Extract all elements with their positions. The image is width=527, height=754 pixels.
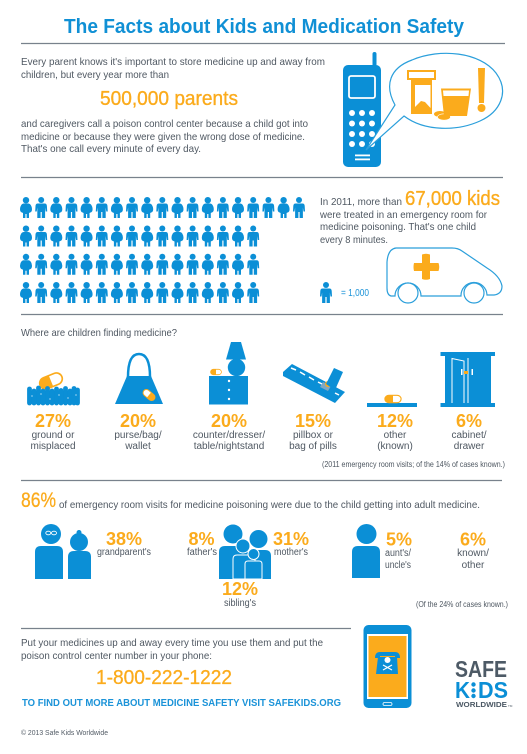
text: 67,000 kids: every 8 minutes. — [320, 234, 388, 246]
heading: where children find medicine: Where are children finding medicine? — [21, 327, 177, 339]
stat sibling's 12% — [222, 579, 258, 609]
label — [30, 430, 76, 452]
panel: pillbox — [283, 364, 345, 452]
statement: 86%: of emergency room visits for medicine poisoning were due to the child getting into adult medicine. — [59, 499, 480, 511]
statement: 86%: 86% — [21, 489, 56, 512]
explanation text: and caregivers call a poison control center because a child got into — [21, 118, 308, 130]
panel: other known — [367, 395, 417, 452]
statistic: 500,000 parents: 500,000 parents — [100, 88, 238, 110]
stat father's 8%: father's — [187, 547, 217, 558]
label — [385, 548, 411, 571]
label: drawer — [454, 441, 485, 452]
stat 12%: 12% — [377, 411, 413, 431]
stat 20%: 20% — [211, 411, 247, 431]
label: purse/bag/ — [114, 430, 162, 441]
stat 15%: 15% — [295, 411, 331, 431]
stat father's 8% — [187, 529, 217, 558]
icon: cabinet — [440, 352, 495, 407]
footnote: 24% of cases: (Of the 24% of cases known.) — [416, 599, 508, 609]
text: 67,000 kids: In 2011, more than — [320, 196, 402, 208]
icon: pill bottle — [408, 71, 450, 120]
intro text: Every parent knows it's important to store medicine up and away from — [21, 56, 325, 68]
stat 5%: 5% — [386, 530, 412, 550]
label: uncle's — [385, 560, 411, 571]
copyright: © 2013 Safe Kids Worldwide — [21, 729, 108, 737]
label: table/nightstand — [194, 441, 264, 452]
icon: pill on shelf — [367, 395, 417, 407]
logo: Safe Kids Worldwide: TM — [508, 704, 513, 708]
panel: grandparents — [35, 524, 151, 579]
call to action text: poison control center number in your phone: — [21, 650, 212, 662]
stat 6%: 6% — [460, 530, 486, 550]
title: The Facts about Kids and Medication Safety — [64, 16, 465, 38]
panel: cabinet — [440, 352, 495, 452]
row 1 — [20, 197, 305, 218]
label: misplaced — [30, 441, 76, 452]
row 3 — [20, 254, 259, 275]
label — [289, 430, 337, 452]
stat father's 8%: 8% — [188, 529, 215, 549]
label: ground or — [32, 430, 75, 441]
text: 67,000 kids: were treated in an emergency room for — [319, 209, 487, 221]
label — [193, 430, 265, 452]
label: (known) — [377, 441, 413, 452]
panel: counter or nightstand — [193, 342, 265, 452]
label: wallet — [124, 441, 151, 452]
panel: ground or misplaced — [28, 371, 79, 452]
label: grandparent's — [97, 547, 151, 558]
stat 6%: 6% — [456, 411, 482, 431]
icon: purse — [115, 354, 163, 404]
label: other — [384, 430, 407, 441]
text: 67,000 kids: medicine poisoning. That's one child — [320, 221, 476, 233]
call to action text — [21, 637, 323, 662]
text: 67,000 kids — [319, 188, 500, 246]
icon: pillbox — [283, 364, 345, 403]
label — [457, 548, 489, 571]
chart: pictogram of 67,000 kids — [20, 197, 305, 303]
panel: aunts and uncles — [352, 524, 412, 578]
explanation text: That's one call every minute of every day. — [21, 143, 201, 155]
stat 20%: 20% — [120, 411, 156, 431]
icon: medicine cup — [441, 88, 471, 116]
phone number: 1-800-222-1222 — [96, 667, 232, 689]
icon: mobile phone — [343, 52, 381, 167]
stat sibling's 12%: sibling's — [224, 598, 256, 609]
logo: Safe Kids Worldwide: WORLDWIDE — [456, 700, 507, 709]
legend: one figure equals 1,000: = 1,000 — [341, 287, 369, 299]
logo: Safe Kids Worldwide — [455, 656, 513, 709]
icon: smartphone with poison phone — [364, 625, 412, 708]
panel: known or other — [457, 530, 489, 571]
label: counter/dresser/ — [193, 430, 265, 441]
speech bubble — [366, 53, 503, 150]
text: 67,000 kids: 67,000 kids — [405, 188, 500, 210]
label: pillbox or — [293, 430, 334, 441]
icon: exclamation mark — [478, 68, 486, 112]
logo: Safe Kids Worldwide: DS — [478, 677, 508, 703]
icon: ambulance — [387, 248, 502, 303]
label: aunt's/ — [385, 548, 411, 559]
intro text: children, but every year more than — [21, 69, 169, 81]
explanation text: medicine or because they were given the wrong dose of medicine. — [21, 131, 305, 143]
statement: 86% — [21, 489, 480, 512]
label: known/ — [457, 548, 489, 559]
stat 38%: 38% — [106, 529, 142, 549]
icon: nightstand with lamp — [209, 342, 248, 404]
explanation text — [21, 118, 308, 155]
label: other — [462, 560, 485, 571]
panel: purse — [114, 354, 163, 452]
stat mother's 31% — [273, 529, 309, 558]
legend: one figure equals 1,000 — [320, 282, 369, 303]
panel: poison control calls — [21, 52, 503, 167]
icon: person — [352, 524, 380, 578]
label: cabinet/ — [451, 430, 487, 441]
panel: parents and siblings — [187, 524, 309, 609]
label — [377, 430, 413, 452]
intro text — [21, 56, 325, 81]
stat 27%: 27% — [35, 411, 71, 431]
stat mother's 31%: 31% — [273, 529, 309, 549]
label — [451, 430, 487, 452]
icon: pill in grass — [28, 371, 79, 404]
row 4 — [20, 282, 259, 303]
logo: Safe Kids Worldwide: K — [455, 677, 470, 703]
icon: grandparents — [35, 524, 91, 579]
logo: Safe Kids Worldwide: SAFE — [455, 656, 507, 682]
stat sibling's 12%: 12% — [222, 579, 258, 599]
website link text: TO FIND OUT MORE ABOUT MEDICINE SAFETY VISIT SAFEKIDS.ORG — [22, 697, 341, 709]
call to action text: Put your medicines up and away every time you use them and put the — [21, 637, 323, 649]
label — [114, 430, 162, 452]
label: bag of pills — [289, 441, 337, 452]
stat mother's 31%: mother's — [274, 547, 308, 558]
icon: family — [219, 524, 271, 579]
row 2 — [20, 226, 259, 246]
